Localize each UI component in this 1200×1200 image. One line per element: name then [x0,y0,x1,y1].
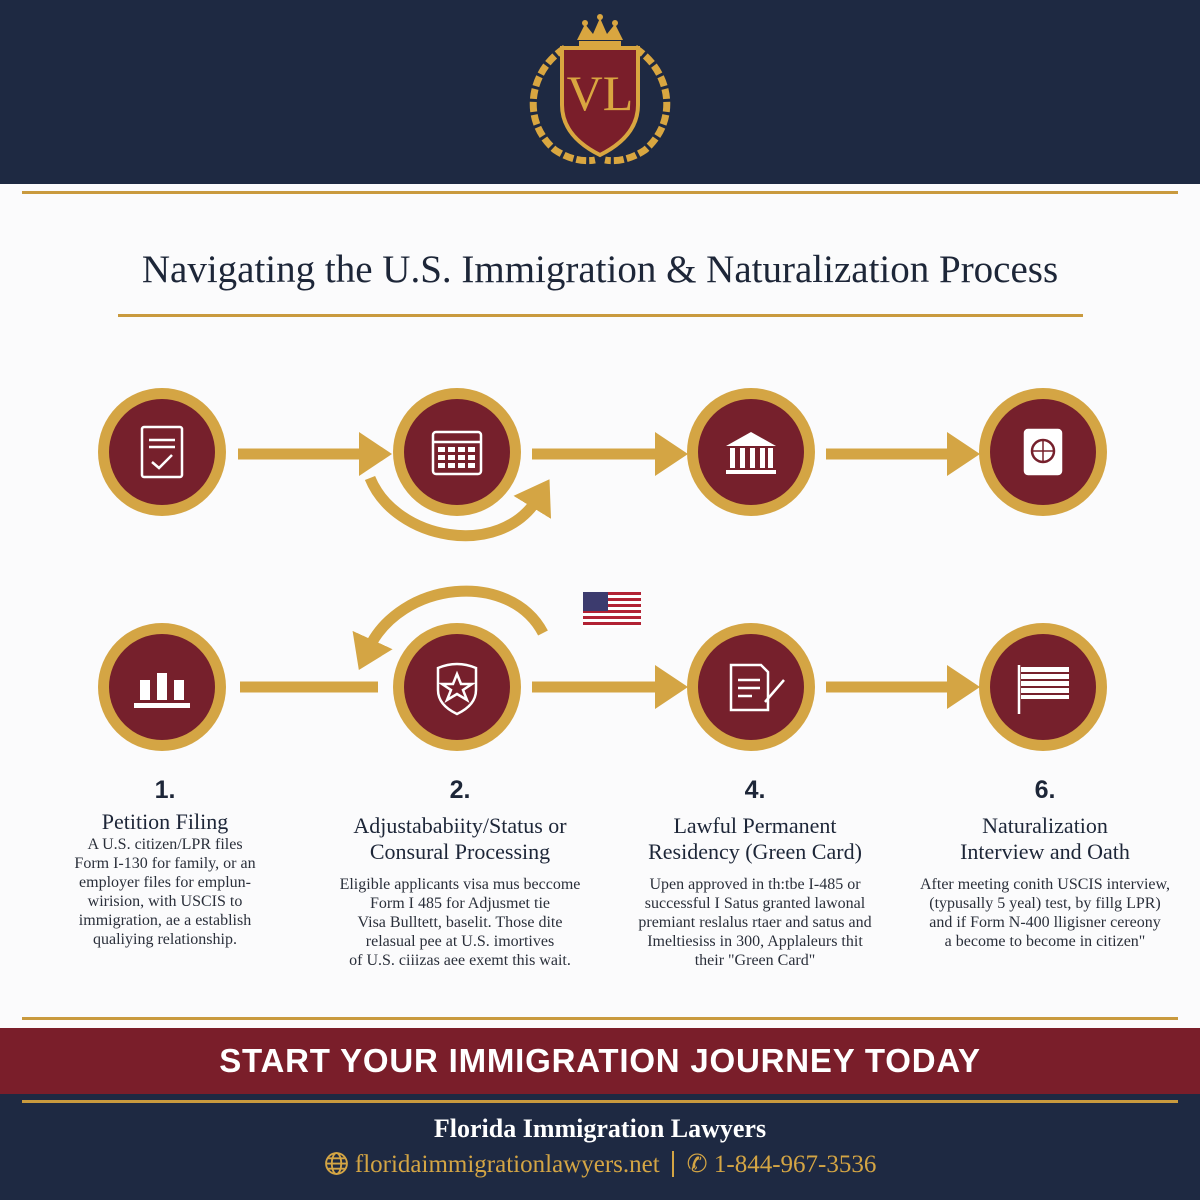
step 2 text: Consural Processing [370,839,550,864]
step 6 text: After meeting conith USCIS interview, [920,876,1170,893]
flag [583,592,641,628]
step 6 text: a become to become in citizen" [945,933,1145,950]
step 4 text: Imeltiesiss in 300, Applaleurs thit [647,933,863,950]
step 1 text: Form I-130 for family, or an [74,855,256,872]
step 4 text: Lawful Permanent [673,813,837,838]
logo: VL [567,65,633,121]
step 4 text: premiant reslalus rtaer and satus and [638,914,872,931]
call to action banner: START YOUR IMMIGRATION JOURNEY TODAY [219,1042,981,1079]
step 2 text: 2. [450,776,470,804]
step 1 text: qualiying relationship. [93,931,237,948]
step 1 text: 1. [155,776,175,804]
step 6 text: 6. [1035,776,1055,804]
step 1 text: employer files for emplun- [79,874,251,891]
step 2 text: Form I 485 for Adjusmet tie [370,895,550,912]
step 6 text [920,776,1170,950]
step 6 text: and if Form N-400 lligisner cereony [929,914,1161,931]
step 6 text: Interview and Oath [960,839,1130,864]
footer [0,1094,1200,1200]
step 4 text: their "Green Card" [695,952,815,969]
step 2 text: Eligible applicants visa mus beccome [340,876,580,893]
step 1 text: wirision, with USCIS to [88,893,242,910]
step 1 text [74,776,256,948]
call to action banner [0,1028,1200,1094]
step 1 text: immigration, ae a establish [79,912,251,929]
header band [0,0,1200,184]
step 4 text: Residency (Green Card) [648,839,862,864]
arrows [238,454,958,687]
step 2 text: of U.S. ciiizas aee exemt this wait. [349,952,571,969]
contact line: floridaimmigrationlawyers.net ✆ 1-844-967-3536 [355,1151,876,1178]
step 1 text: Petition Filing [102,809,228,834]
crown [577,14,623,46]
step 2 text: Visa Bulltett, baselit. Those dite [358,914,562,931]
title: Navigating the U.S. Immigration & Naturalization Process [142,248,1058,291]
step 4 text [638,776,872,969]
step 6 text: (typusally 5 yeal) test, by fillg LPR) [929,895,1161,912]
wreaths [533,48,667,161]
firm name: Florida Immigration Lawyers [434,1114,766,1143]
step 6 text: Naturalization [982,813,1108,838]
icons [134,427,1069,714]
step 2 text: relasual pee at U.S. imortives [366,933,554,950]
step 2 text: Adjustababiity/Status or [353,813,567,838]
step 4 text: 4. [745,776,765,804]
step circles [98,388,1107,751]
step 1 text: A U.S. citizen/LPR files [87,836,243,853]
logo [530,14,670,164]
shield [562,48,638,155]
step 2 text [340,776,580,969]
step 4 text: successful I Satus granted lawonal [645,895,865,912]
step 4 text: Upen approved in th:tbe I-485 or [649,876,861,893]
